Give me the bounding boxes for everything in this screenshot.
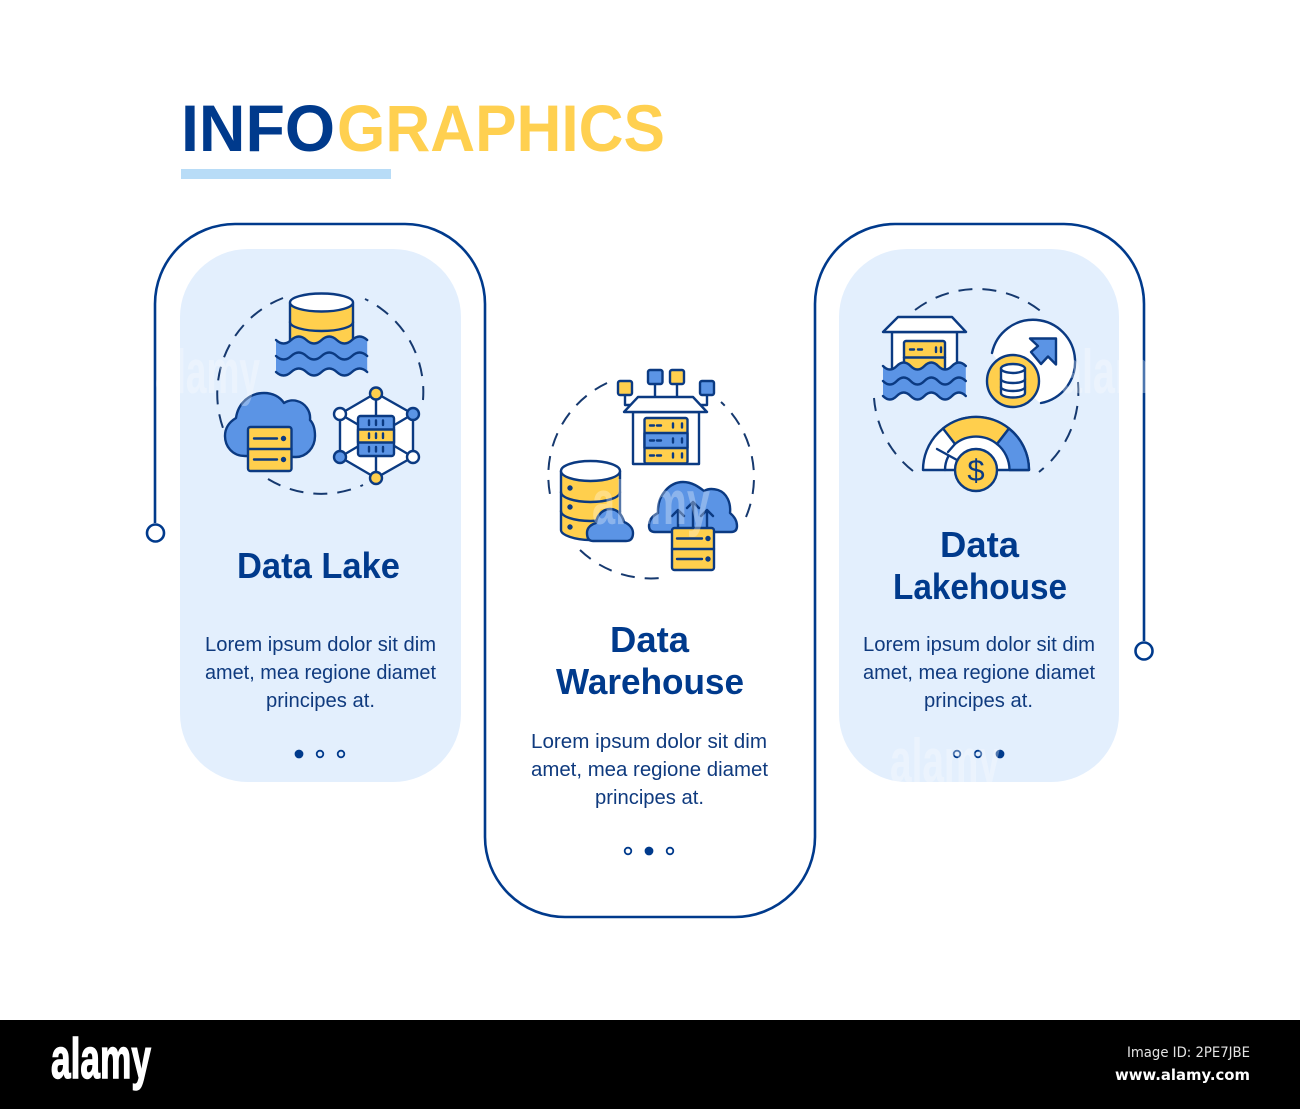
body text: data warehouse: amet, mea regione diamet bbox=[531, 759, 768, 781]
panel: data lake bbox=[180, 249, 461, 782]
panel: data lakehouse bbox=[839, 249, 1119, 782]
footer image id: Image ID: 2PE7JBE bbox=[1127, 1045, 1250, 1061]
body text: data lake: amet, mea regione diamet bbox=[205, 662, 436, 684]
pagination dots: data warehouse bbox=[625, 848, 673, 854]
icon: data warehouse bbox=[548, 370, 754, 578]
icon glyph: dollar sign: $ bbox=[967, 453, 985, 488]
body text: data warehouse bbox=[531, 731, 768, 809]
body text: data lakehouse: principes at. bbox=[924, 690, 1033, 712]
heading: data lakehouse bbox=[893, 524, 1067, 607]
heading: data lakehouse: Data bbox=[940, 524, 1020, 565]
heading: data lakehouse: Lakehouse bbox=[893, 566, 1067, 607]
watermarks: alamy bbox=[592, 469, 710, 538]
body text: data warehouse: Lorem ipsum dolor sit dim bbox=[531, 731, 767, 753]
icon: data lake bbox=[217, 294, 423, 494]
body text: data lake bbox=[205, 634, 436, 712]
panel: data warehouse bbox=[531, 370, 768, 854]
heading: data warehouse bbox=[556, 619, 744, 702]
watermarks bbox=[155, 338, 1150, 796]
pagination dots: data lakehouse bbox=[954, 750, 1004, 758]
footer logo: alamy bbox=[51, 1027, 151, 1091]
title bbox=[181, 91, 665, 179]
title: GRAPHICS bbox=[337, 91, 665, 165]
body text: data lakehouse: Lorem ipsum dolor sit dim bbox=[863, 634, 1095, 656]
watermarks: alamy bbox=[890, 727, 1000, 796]
body text: data lake: Lorem ipsum dolor sit dim bbox=[205, 634, 436, 656]
body text: data lake: principes at. bbox=[266, 690, 375, 712]
body text: data lakehouse bbox=[863, 634, 1095, 712]
connector outline bbox=[147, 224, 1152, 917]
heading: data lake: Data Lake bbox=[237, 545, 400, 586]
title: INFO bbox=[181, 91, 335, 165]
footer bar bbox=[0, 1020, 1300, 1109]
heading: data warehouse: Data bbox=[610, 619, 690, 660]
footer url: www.alamy.com bbox=[1115, 1066, 1250, 1084]
pagination dots: data lake bbox=[296, 750, 344, 758]
heading: data warehouse: Warehouse bbox=[556, 661, 744, 702]
body text: data warehouse: principes at. bbox=[595, 787, 704, 809]
watermarks: alam bbox=[1060, 338, 1150, 407]
body text: data lakehouse: amet, mea regione diamet bbox=[863, 662, 1095, 684]
watermarks: alamy bbox=[155, 338, 260, 407]
icon: data lakehouse bbox=[874, 289, 1078, 491]
